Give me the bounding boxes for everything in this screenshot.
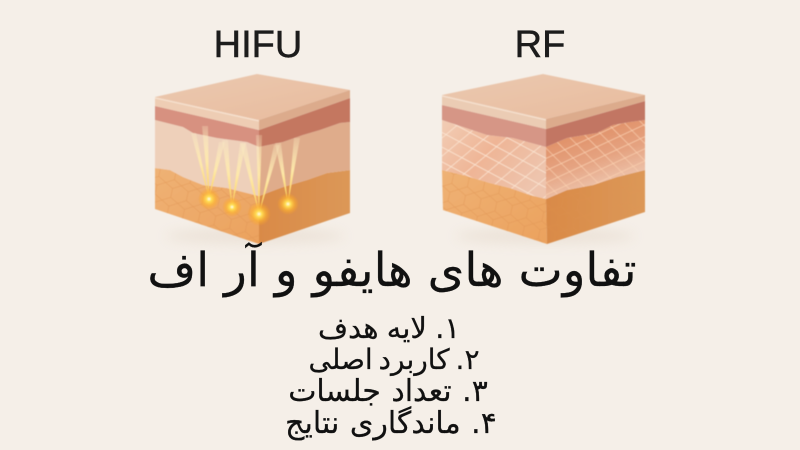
HIFU ultrasound beams	[191, 126, 300, 214]
cube: RF skin layers	[442, 74, 645, 244]
label: RF: RF	[515, 24, 565, 66]
RF epidermis red band	[442, 101, 645, 147]
label: HIFU: HIFU	[214, 24, 302, 66]
RF dermis with collagen mesh	[442, 120, 645, 199]
HIFU dermis layer	[155, 120, 350, 196]
title: تفاوت های هایفو و آر اف	[147, 243, 637, 298]
RF top face	[442, 74, 645, 129]
HIFU top face	[155, 74, 350, 130]
list item 1: ۱. لایه هدف	[318, 311, 460, 345]
HIFU fat layer	[155, 168, 350, 244]
list item 3: ۳. تعداد جلسات	[288, 374, 488, 409]
list: comparison points	[285, 311, 497, 441]
list item 4: ۴. ماندگاری نتایج	[285, 406, 497, 441]
RF fat layer	[442, 170, 645, 244]
HIFU focal points	[198, 188, 299, 226]
HIFU epidermis red band	[155, 98, 350, 147]
cube: HIFU skin layers	[155, 74, 350, 244]
list item 2: ۲. کاربرد اصلی	[308, 343, 480, 376]
